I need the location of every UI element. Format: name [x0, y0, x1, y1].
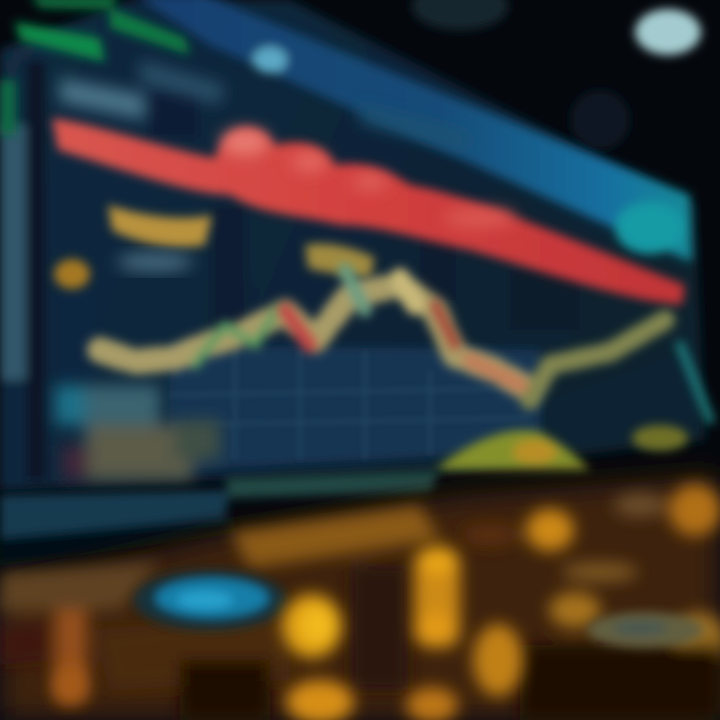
panel: keyboard ledge	[0, 470, 440, 566]
band: green header top left	[0, 0, 190, 135]
dish with blue center	[134, 570, 286, 630]
series: candlestick line chart	[100, 270, 710, 420]
lower left widgets	[55, 385, 220, 480]
green yellow mound	[435, 425, 688, 470]
moon glow top right	[412, 0, 701, 150]
series: red declining band	[52, 118, 685, 305]
screen column shadows	[212, 205, 246, 325]
panel: gold coins	[0, 475, 720, 720]
screen grid rows	[170, 350, 530, 460]
band: blue header	[135, 0, 692, 262]
panel: chart screen	[0, 0, 705, 490]
header labels grey	[60, 60, 470, 150]
markers: yellow blocks	[54, 205, 375, 289]
bright gold coin stacks	[54, 546, 523, 720]
coin tray lower right	[587, 612, 703, 648]
screen left edge strip	[0, 125, 26, 380]
lower screen blue area	[170, 345, 540, 470]
